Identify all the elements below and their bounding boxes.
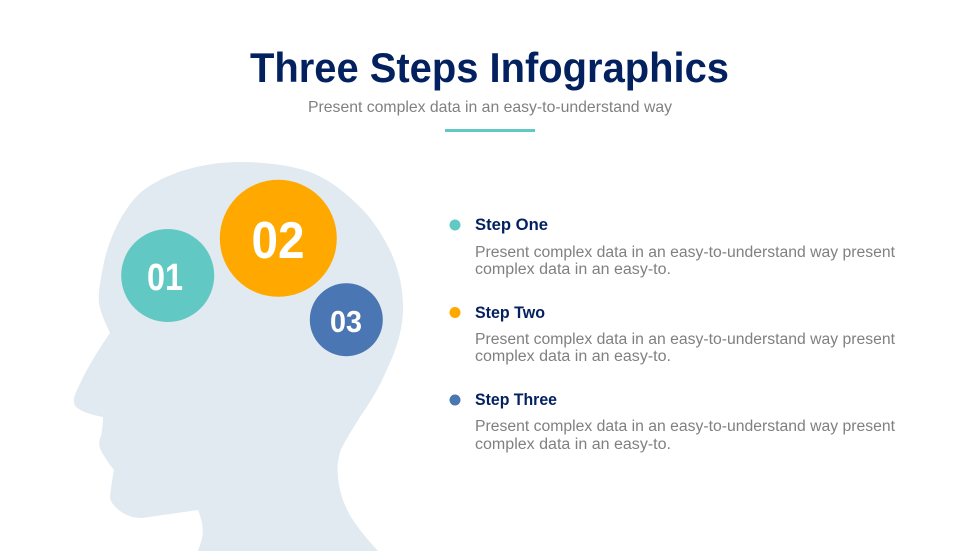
step two marker xyxy=(450,307,460,318)
step two xyxy=(450,303,896,365)
step three description: Present complex data in an easy-to-understand way present xyxy=(475,418,896,435)
step one heading: Step One xyxy=(475,215,548,234)
step one xyxy=(450,215,896,278)
step two description: Present complex data in an easy-to-understand way present xyxy=(475,331,896,348)
head silhouette xyxy=(74,162,403,551)
step two description: complex data in an easy-to. xyxy=(475,348,671,365)
circle 03: 03 xyxy=(330,304,362,339)
step two heading: Step Two xyxy=(475,303,545,322)
title: Three Steps Infographics xyxy=(250,44,729,91)
step three heading: Step Three xyxy=(475,390,557,409)
head illustration with numbered circles xyxy=(74,162,403,551)
circle 02: 02 xyxy=(252,212,304,270)
step one description: complex data in an easy-to. xyxy=(475,261,671,278)
circle 02 xyxy=(220,180,337,297)
step one marker xyxy=(450,220,460,230)
circle 01: 01 xyxy=(147,257,183,299)
subtitle: Present complex data in an easy-to-understand way xyxy=(308,99,672,116)
circle 01 xyxy=(121,229,214,322)
title accent underline xyxy=(445,129,535,132)
step three description: complex data in an easy-to. xyxy=(475,436,671,453)
step three xyxy=(450,390,896,453)
step one description: Present complex data in an easy-to-understand way present xyxy=(475,244,896,261)
circle 03 xyxy=(310,283,383,356)
step three marker xyxy=(450,394,460,406)
